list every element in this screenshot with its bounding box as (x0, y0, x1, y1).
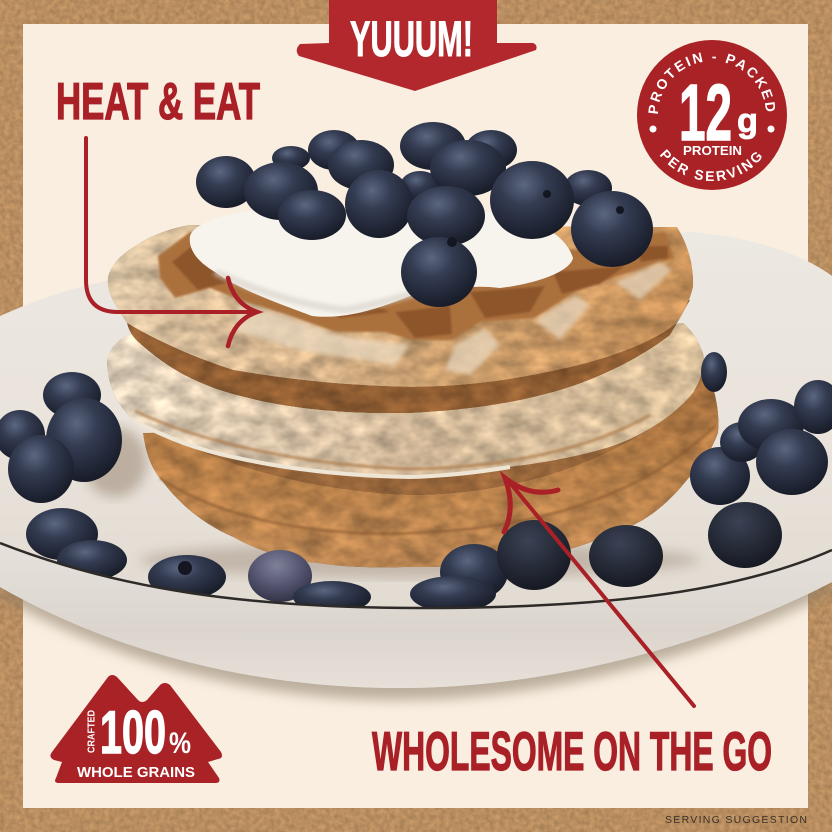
footnote: serving suggestion: SERVING SUGGESTION (665, 814, 807, 826)
middle waffle (107, 323, 704, 477)
shadow under waffles on plate (140, 542, 700, 578)
waffle top surface and pits (158, 232, 674, 340)
banner arrow: YUUUM! (297, 0, 537, 91)
whipped cream (190, 206, 573, 317)
arrow to top waffle (86, 138, 257, 346)
arrow to bottom waffles (504, 478, 694, 706)
top waffle body (108, 225, 693, 387)
front lip highlights (235, 262, 672, 375)
badge: 12g protein: PROTEIN (683, 144, 742, 158)
heading: heat & eat: HEAT & EAT (56, 73, 260, 131)
blueberries on top (196, 122, 653, 307)
badge: 12g protein: 12 (679, 68, 732, 157)
badge: 12g protein: PER SERVING (660, 149, 762, 181)
badge: 100% whole grains: CRAFTED (86, 710, 98, 753)
badge: 100% whole grains (50, 675, 222, 783)
badge: 100% whole grains: WHOLE GRAINS (77, 765, 195, 781)
waffle stack (107, 225, 719, 568)
shadow left of waffles on plate (83, 427, 147, 497)
badge: 12g protein: g (737, 102, 758, 140)
badge: 100% whole grains: % (169, 727, 191, 760)
cream shading (215, 272, 420, 310)
plate (0, 232, 832, 688)
banner arrow: YUUUM!: YUUUM! (350, 11, 473, 67)
plate rim (0, 543, 832, 688)
badge: 12g protein: PROTEIN - PACKED (648, 52, 775, 114)
badge: 12g protein (637, 40, 787, 190)
plate drop shadow (0, 560, 832, 700)
middle waffle underside (118, 360, 697, 495)
bottom waffle (143, 373, 719, 568)
top waffle underside (127, 300, 690, 413)
blueberries scattered on plate (0, 352, 832, 613)
badge: 100% whole grains: 100 (100, 699, 166, 766)
